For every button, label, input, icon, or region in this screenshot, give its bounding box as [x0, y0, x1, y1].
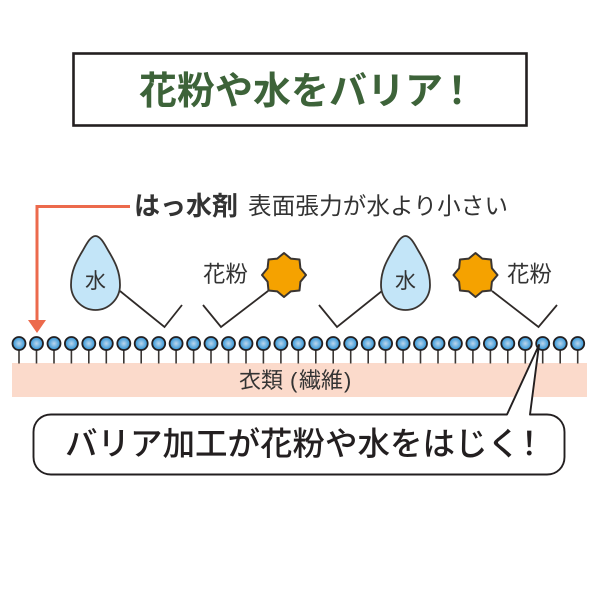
repellent heading: はっ水剤 — [134, 191, 238, 221]
water drop 1 with contact angle: 水 — [85, 270, 106, 293]
pollen 1 with contact angle — [203, 253, 306, 327]
pollen 1 with contact angle: 花粉 — [203, 262, 248, 287]
callout: ！ — [513, 426, 546, 462]
callout: バリア加工が花粉や水をはじく — [65, 426, 520, 462]
water drop 1 with contact angle — [71, 236, 182, 327]
pollen 2 with contact angle — [454, 253, 557, 327]
fabric band: 衣類 — [239, 368, 283, 393]
title: ！ — [438, 71, 476, 113]
pollen 2 with contact angle: 花粉 — [507, 262, 552, 287]
arrow: repellent to molecule — [28, 206, 130, 333]
fabric band — [12, 363, 587, 397]
water drop 2 with contact angle: 水 — [395, 270, 416, 293]
title: 花粉や水をバリア — [139, 71, 443, 113]
fabric band: ) — [344, 368, 351, 393]
molecule row — [12, 337, 584, 364]
water drop 2 with contact angle — [319, 236, 430, 327]
repellent heading: 表面張力が水より小さい — [248, 193, 508, 219]
fabric band: ( — [290, 368, 298, 393]
repellent heading — [134, 191, 508, 221]
callout — [34, 345, 564, 474]
title — [74, 54, 526, 126]
fabric band: 繊維 — [299, 368, 343, 393]
